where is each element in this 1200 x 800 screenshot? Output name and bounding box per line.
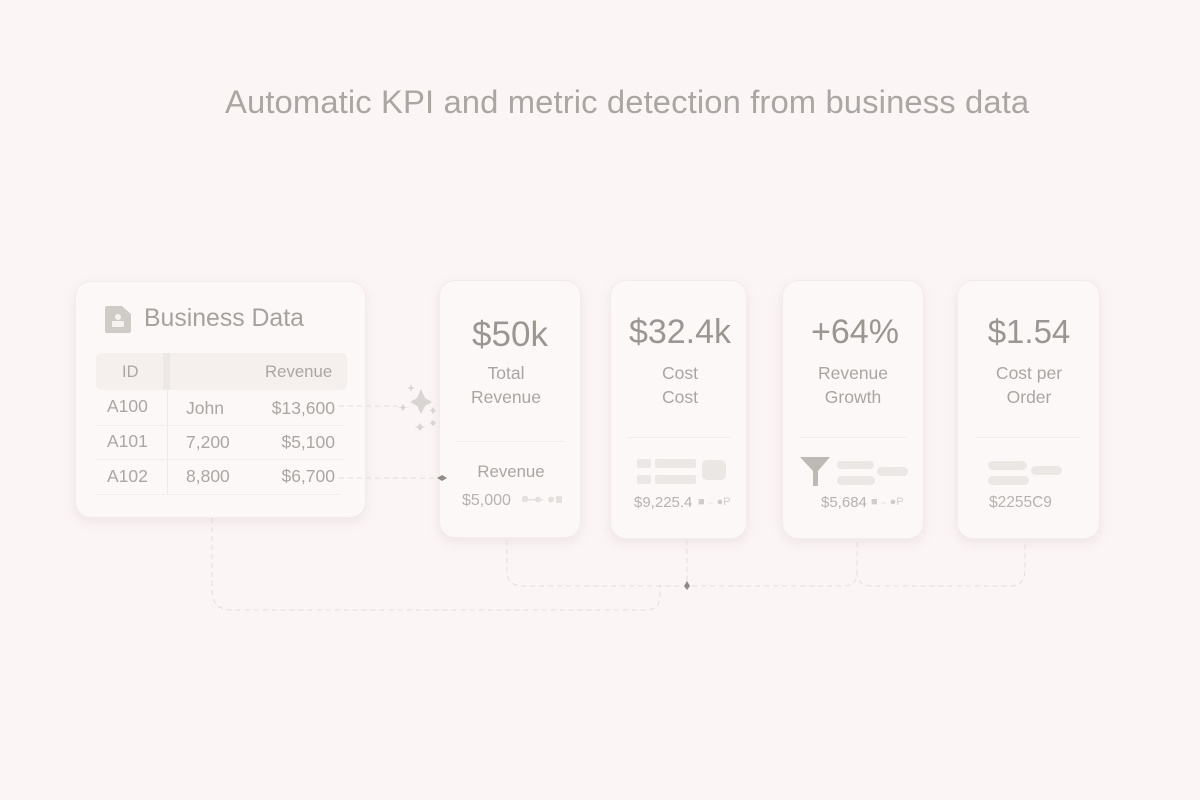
kpi label: Growth	[825, 387, 881, 407]
panel: cost	[610, 280, 747, 539]
table row A102: $6,700	[281, 466, 335, 486]
data table	[96, 353, 347, 495]
table header	[96, 353, 347, 390]
panel: total revenue	[439, 280, 581, 538]
mini legend	[522, 496, 562, 503]
panel: business data	[75, 281, 366, 518]
panel heading: Business Data	[144, 305, 304, 332]
kpi label	[996, 363, 1062, 407]
kpi label	[471, 363, 541, 407]
table row A102	[107, 466, 335, 486]
table row A101: $5,100	[281, 432, 335, 452]
mini legend: ■ ₋ ●P	[871, 496, 904, 508]
table row A101: A101	[107, 431, 148, 451]
kpi label: Cost	[662, 363, 698, 383]
icon: sparkles	[398, 384, 436, 431]
icon: document	[105, 306, 131, 333]
panel: revenue growth	[782, 280, 924, 539]
kpi label: Order	[1007, 387, 1051, 407]
sub value: $9,225.4	[634, 494, 692, 511]
icon: funnel	[800, 457, 830, 486]
sub value: $2255C9	[989, 494, 1052, 511]
kpi value: $50k	[472, 315, 548, 354]
kpi label: Cost per	[996, 363, 1062, 383]
table row A100: $13,600	[272, 398, 335, 418]
mini bars	[837, 461, 908, 485]
kpi label	[662, 363, 698, 407]
table row A102: A102	[107, 466, 148, 486]
table row A101	[107, 431, 335, 452]
panel: cost per order	[957, 280, 1100, 539]
mini bars	[988, 461, 1062, 485]
kpi label: Cost	[662, 387, 698, 407]
kpi label: Total	[488, 363, 524, 383]
kpi value: $1.54	[988, 313, 1070, 350]
sub label: Revenue	[477, 462, 545, 481]
table row A102: 8,800	[186, 466, 230, 486]
kpi label: Revenue	[471, 387, 541, 407]
table header: Revenue	[265, 362, 332, 381]
table row A101: 7,200	[186, 432, 230, 452]
sub value: $5,684	[821, 494, 867, 511]
title: Automatic KPI and metric detection from business data	[225, 83, 1029, 120]
sub value: $5,000	[462, 492, 511, 509]
table row A100: John	[186, 398, 224, 418]
kpi label	[818, 363, 888, 407]
mini legend: ■ ₋ ●P	[698, 496, 731, 508]
kpi label: Revenue	[818, 363, 888, 383]
table row A100	[107, 396, 335, 418]
table row A100: A100	[107, 396, 148, 416]
mini bars	[637, 459, 726, 484]
kpi value: $32.4k	[629, 313, 731, 351]
table header: ID	[122, 363, 138, 381]
kpi value: +64%	[811, 313, 899, 351]
